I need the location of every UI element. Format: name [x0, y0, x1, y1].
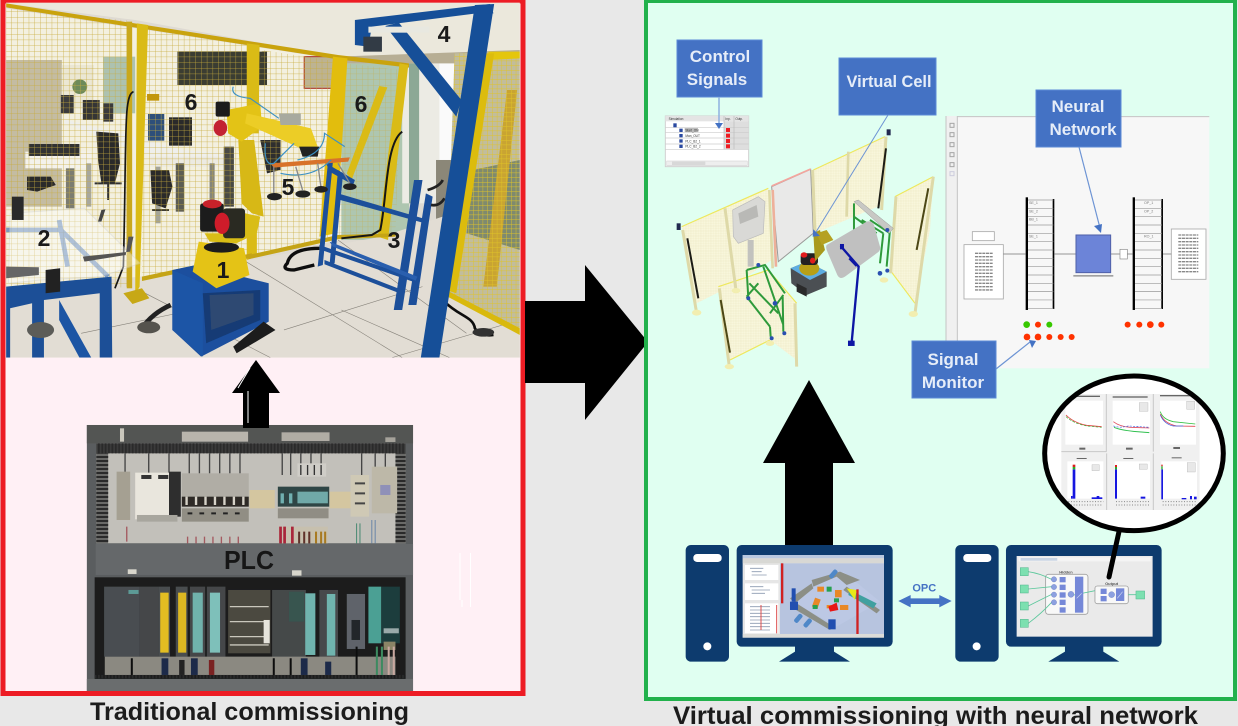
fence mesh: [6, 8, 128, 300]
blue gantry 4: [355, 4, 494, 358]
panel: traditional commissioning: [3, 1, 523, 694]
diagram: neural network simulation: OP_2: [1144, 209, 1153, 213]
photo number labels: 5: [282, 174, 295, 200]
table: simulation signals: Simulation: [669, 117, 684, 121]
yellow fence frame: [6, 3, 409, 304]
computer: neural network PC: Hidden: [1059, 569, 1073, 574]
table: simulation signals: PLC_B2_1: [685, 139, 701, 143]
diagram: neural network simulation: RO_1: [1144, 234, 1154, 238]
label: PLC: PLC: [224, 545, 274, 575]
diagram: neural network simulation: BB_1: [1029, 218, 1038, 222]
photo number labels: 6: [355, 91, 367, 117]
diagram: neural network simulation: SE_1: [1029, 201, 1038, 205]
callout: virtual cell: Virtual Cell: [846, 72, 932, 91]
photo: real robot cell: [6, 3, 520, 358]
photo number labels: 6: [185, 89, 197, 115]
blue table 2 with acrylic tray: [6, 197, 140, 358]
arrow: traditional to virtual: [525, 265, 648, 420]
computer: neural network PC: Output: [1105, 581, 1119, 586]
table: simulation signals: Man_OUT: [685, 134, 700, 138]
callout: control signals: Control: [690, 47, 750, 66]
table: simulation signals: [665, 116, 749, 167]
3D view: virtual cell: [677, 129, 933, 369]
table: simulation signals: Inp.: [725, 117, 731, 121]
magnifier line: [1109, 527, 1120, 577]
callout: neural network: Network: [1049, 120, 1117, 139]
robot 1 and 5: [172, 87, 357, 357]
magnifier: training charts: [1045, 376, 1223, 531]
callout: signal monitor: Monitor: [922, 373, 985, 392]
right yellow fence: [446, 52, 520, 333]
diagram: neural network simulation: SE_1: [1029, 234, 1038, 238]
computers linked by OPC: [686, 545, 1162, 662]
photo number labels: 1: [217, 257, 230, 283]
photo number labels: 3: [388, 227, 400, 253]
photo number labels: 2: [38, 225, 50, 251]
table: simulation signals: PLC_B2_2: [685, 145, 701, 149]
office furniture behind the mesh: [25, 79, 281, 223]
computer: simulation PC: [686, 545, 893, 662]
callout: control signals: Signals: [687, 70, 747, 89]
blue rack 3: [318, 162, 433, 310]
OPC link: OPC: [912, 582, 936, 594]
PLC cabinet photo: [87, 425, 413, 691]
heading: traditional commissioning: Traditional commissioning: [90, 698, 409, 726]
photo number labels: [38, 21, 451, 283]
table: simulation signals: Outp.: [735, 117, 743, 121]
OPC link: [898, 582, 952, 607]
callout: signal monitor: Signal: [927, 350, 979, 369]
callout: signal monitor: [912, 340, 1036, 398]
callout: virtual cell: [816, 58, 936, 232]
arrow: PLC to cell: [232, 360, 280, 428]
diagram: neural network simulation: SE_2: [1029, 209, 1038, 213]
photo number labels: 4: [438, 21, 451, 47]
callout: neural network: [1036, 90, 1121, 233]
panel: virtual commissioning: [646, 1, 1235, 699]
computer: neural network PC: [955, 545, 1162, 662]
callout: neural network: Neural: [1052, 97, 1104, 116]
callout: control signals: [677, 40, 762, 129]
arrow: computers to virtual cell: [763, 380, 855, 548]
diagram: neural network simulation: OP_1: [1144, 201, 1153, 205]
diagram: neural network simulation: [946, 116, 1209, 368]
table: simulation signals: Start_ON: [685, 129, 699, 133]
